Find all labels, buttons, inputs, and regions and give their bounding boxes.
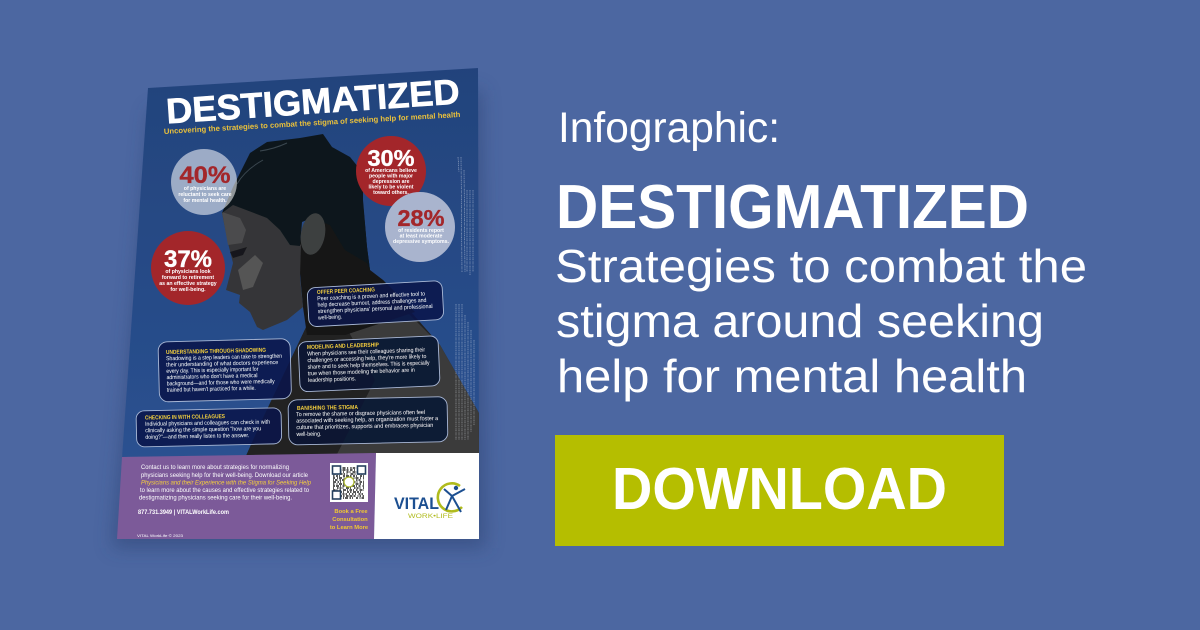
Vital WorkLife logo <box>394 483 465 520</box>
stat circle: 40%: of physicians are <box>184 186 226 192</box>
neck shadow <box>297 200 415 335</box>
purple footer panel: to learn more about the causes and effective strategies related to <box>140 487 309 494</box>
box: understanding through shadowing: their understanding of what doctors experience <box>166 360 278 369</box>
box: offer peer coaching: help decrease burnout, address challenges and <box>317 298 427 309</box>
stat circle: 37%: of physicians look <box>165 269 211 275</box>
box: understanding through shadowing: trained but haven't practiced for a while. <box>167 386 256 394</box>
box: banishing the stigma: BANISHING THE STIGMA <box>297 405 359 412</box>
box: checking in with colleagues: Individual physicians and colleagues can check in with <box>145 420 270 428</box>
stat circle: 30%: depression are <box>373 179 410 185</box>
box: understanding through shadowing: Shadowing is a step leaders can take to strengthen <box>166 354 282 362</box>
face highlights <box>222 212 246 245</box>
box: checking in with colleagues <box>136 408 282 447</box>
poster blue field <box>122 68 479 458</box>
subheading: Strategies to combat the <box>555 240 1087 292</box>
box: offer peer coaching: well-being. <box>317 314 343 322</box>
stat circle: 28%: 28% <box>398 205 444 231</box>
box: banishing the stigma: well-being. <box>295 432 322 438</box>
main heading: DESTIGMATIZED <box>556 173 1029 242</box>
ear <box>300 213 326 255</box>
eyebrow: Infographic: Infographic: <box>558 104 780 152</box>
silhouette illustration <box>222 134 479 458</box>
box: understanding through shadowing: background—and for those who were medically <box>167 379 275 387</box>
download button <box>555 435 1004 546</box>
stat circle: 37%: as an effective strategy <box>159 281 217 287</box>
box: modeling and leadership: When physicians see their colleagues sharing their <box>307 347 425 358</box>
stat circle: 37% <box>151 231 225 305</box>
box: checking in with colleagues: CHECKING IN WITH COLLEAGUES <box>145 414 225 421</box>
infographic canvas <box>110 68 1085 552</box>
box: modeling and leadership: share and to seek help themselves. This is especially <box>308 361 430 371</box>
consultation call to action: to Learn More <box>330 525 369 531</box>
copyright: VITAL WorkLife © 2023 <box>137 533 184 538</box>
hair <box>222 134 370 270</box>
stat circle: 30%: 30% <box>368 145 414 171</box>
box: checking in with colleagues: clinically asking the simple question "how are you <box>145 426 261 434</box>
box: modeling and leadership <box>298 336 440 392</box>
subheading: stigma around seeking <box>556 295 1044 347</box>
box: understanding through shadowing: every day. This is especially important for <box>166 367 258 375</box>
purple footer panel <box>117 453 376 539</box>
download button: DOWNLOAD <box>612 456 947 522</box>
box: modeling and leadership: true when those modeling the behavior are in <box>308 368 415 377</box>
poster thumbnail <box>117 68 479 539</box>
consultation call to action: Book a Free <box>334 509 368 515</box>
Vital WorkLife logo: VITAL <box>394 495 439 513</box>
stat circle: 37%: 37% <box>164 246 212 273</box>
purple footer panel: physicians seeking help for their well-being. Download our article <box>141 472 308 479</box>
Vital WorkLife logo: WORK•LIFE <box>408 514 453 520</box>
footer copy: Contact us to learn more about strategies for normalizing <box>141 464 289 471</box>
box: offer peer coaching <box>307 280 444 327</box>
stat circle: 40%: reluctant to seek care <box>178 192 232 198</box>
box: modeling and leadership: leadership positions. <box>308 376 357 384</box>
stat circle: 30%: likely to be violent <box>369 184 414 190</box>
box: banishing the stigma <box>288 397 448 445</box>
box: offer peer coaching: strengthen physicians' personal and professional <box>318 304 433 315</box>
stat circle: 30%: toward others. <box>373 190 409 196</box>
face <box>222 198 303 330</box>
QR code <box>330 463 368 502</box>
box: banishing the stigma: associated with seeking help, an organization must foster a <box>296 416 439 425</box>
box: understanding through shadowing: administrators who don't have a medical <box>166 373 258 381</box>
stat circle: 30%: people with major <box>369 174 413 180</box>
box: checking in with colleagues: doing?"—and then really listen to the answer. <box>145 433 250 441</box>
poster title: DESTIGMATIZED <box>165 72 461 131</box>
consultation call to action: Consultation <box>332 517 368 523</box>
stat circle: 28%: depressive symptoms. <box>393 239 450 245</box>
box: understanding through shadowing: UNDERSTANDING THROUGH SHADOWING <box>166 348 266 356</box>
box: offer peer coaching: Peer coaching is a proven and effective tool to <box>317 291 425 302</box>
white logo panel <box>374 453 479 539</box>
stat circle: 28%: of residents report <box>398 228 444 234</box>
stat circle: 40%: 40% <box>180 162 230 189</box>
box: understanding through shadowing <box>158 339 292 402</box>
poster drop shadow <box>112 90 486 548</box>
stat circle: 37%: forward to retirement <box>162 275 214 281</box>
stat circle: 30%: of Americans believe <box>365 168 417 174</box>
stat circle: 30% <box>356 136 426 206</box>
shoulders <box>245 268 479 458</box>
purple footer panel: Physicians and their Experience with the Stigma for Seeking Help <box>141 480 311 486</box>
contact line: 877.731.3949 | VITALWorkLife.com <box>138 509 229 516</box>
poster subtitle: Uncovering the strategies to combat the stigma of seeking help for mental health <box>164 110 461 136</box>
stat circle: 37%: for well-being. <box>170 287 206 293</box>
consultation call to action <box>330 509 369 531</box>
stat circle: 40% <box>171 149 237 215</box>
subheading: help for mental health <box>557 350 1027 402</box>
subheading <box>555 240 1087 402</box>
box: offer peer coaching: OFFER PEER COACHING <box>317 287 375 296</box>
box: modeling and leadership: MODELING AND LEADERSHIP <box>307 342 379 351</box>
box: modeling and leadership: challenges or accessing help, they're more likely to <box>307 354 426 364</box>
stat circle: 28%: at least moderate <box>400 234 442 240</box>
box: banishing the stigma: To remove the shame or disgrace physicians often feel <box>296 410 425 418</box>
stat circle: 28% <box>385 192 455 262</box>
box: banishing the stigma: culture that prioritizes, supports and embraces physician <box>296 423 433 431</box>
purple footer panel: destigmatizing physicians seeking care for their well-being. <box>139 494 292 502</box>
stat circle: 40%: for mental health. <box>183 198 227 204</box>
